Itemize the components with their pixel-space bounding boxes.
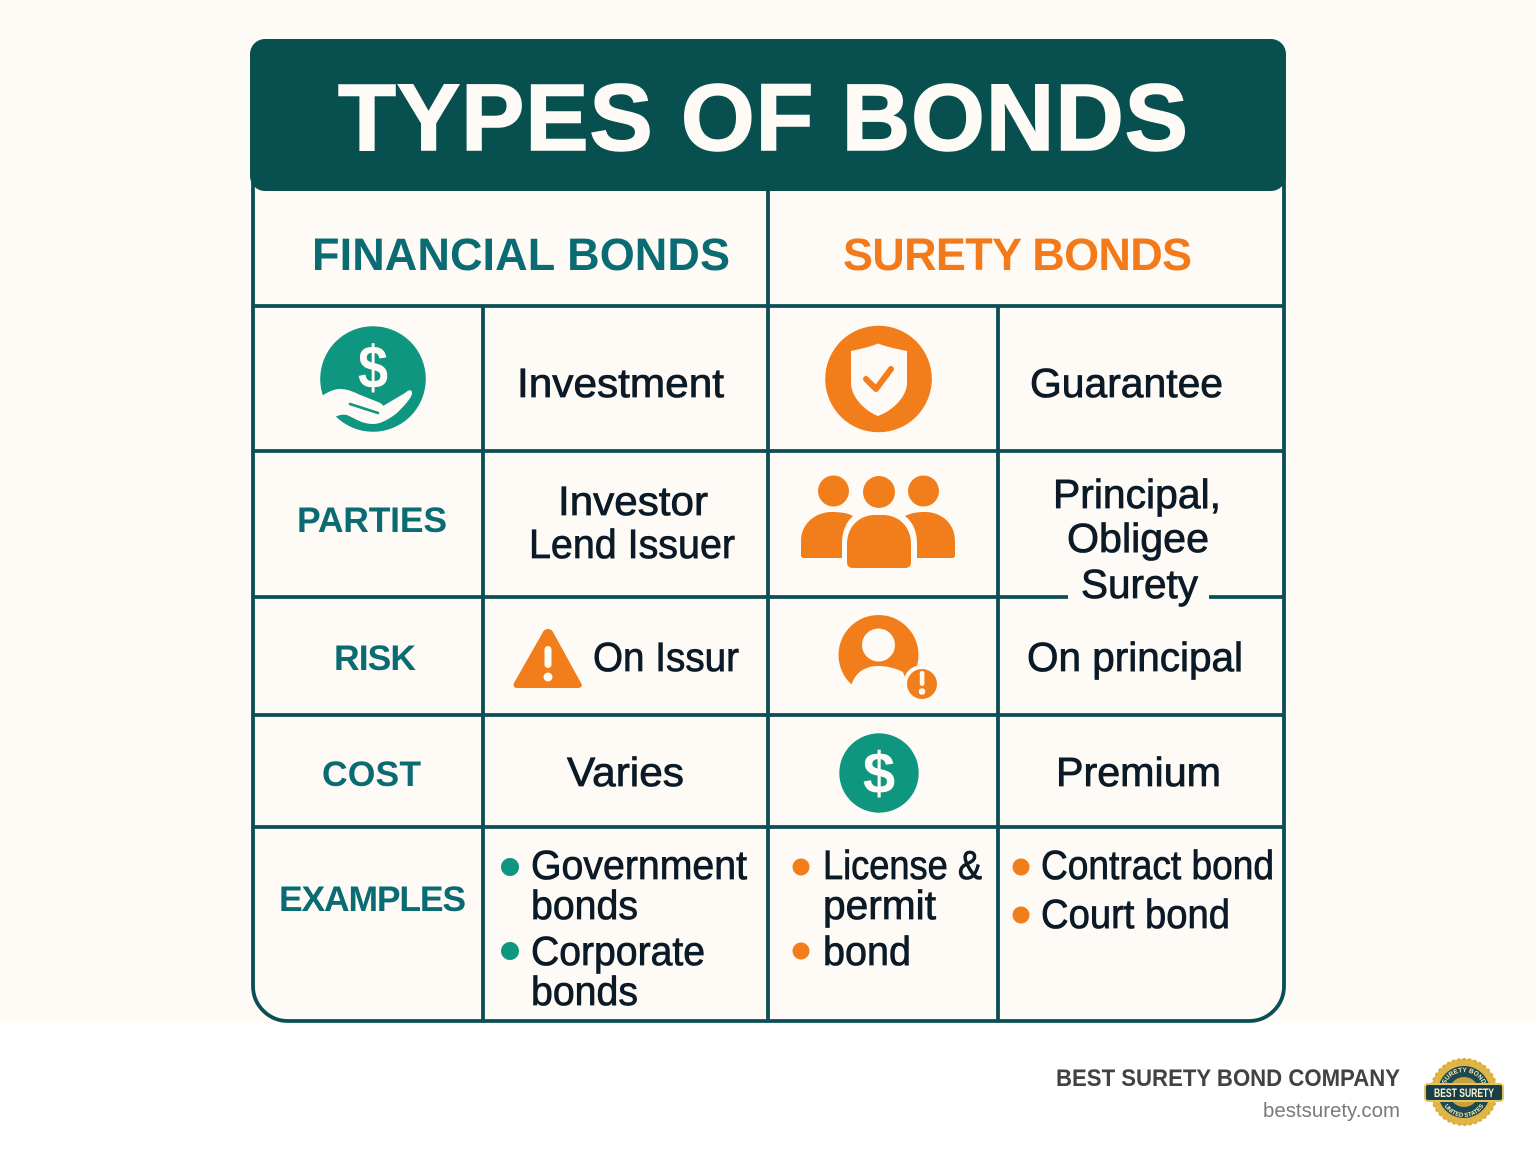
list: contract and court: Contract bond xyxy=(1041,842,1274,888)
icon: dollar coin xyxy=(839,733,919,813)
icon: seal badge: BEST SURETY xyxy=(1434,1088,1494,1100)
icon: shield with check xyxy=(825,326,932,432)
text: investment: Investment xyxy=(517,360,724,406)
list: license and permit xyxy=(792,842,982,974)
icon: dollar coin: $ xyxy=(863,741,895,806)
icon: seal badge xyxy=(1424,1058,1504,1126)
text: principal obligee surety: Obligee xyxy=(1067,515,1209,561)
text: guarantee: Guarantee xyxy=(1030,360,1223,406)
title banner xyxy=(250,39,1286,191)
list: contract and court xyxy=(1012,842,1274,937)
icon: seal badge: UNITED STATES xyxy=(1445,1104,1484,1117)
table xyxy=(253,170,1284,1021)
icon: warning triangle xyxy=(514,629,582,688)
label: cost: COST xyxy=(322,754,421,794)
footer url: bestsurety.com xyxy=(1263,1100,1400,1122)
footer company name: BEST SURETY BOND COMPANY xyxy=(1056,1065,1400,1092)
list: financial examples: bonds xyxy=(531,882,638,928)
text: on principal: On principal xyxy=(1027,634,1243,680)
list: financial examples: bonds xyxy=(531,968,638,1014)
text: investor lend issuer: Lend Issuer xyxy=(529,521,735,567)
title: TYPES OF BONDS xyxy=(338,65,1188,171)
list: license and permit: bond xyxy=(823,928,911,974)
text: principal obligee surety xyxy=(1053,471,1221,607)
icon: hand holding dollar: $ xyxy=(358,334,388,401)
heading: financial bonds: FINANCIAL BONDS xyxy=(312,229,730,280)
list: license and permit: permit xyxy=(823,882,936,928)
icon: seal badge: SURETY BOND xyxy=(1442,1068,1486,1083)
icon: hand holding dollar xyxy=(305,326,426,432)
label: examples: EXAMPLES xyxy=(279,879,466,919)
label: risk: RISK xyxy=(334,638,416,678)
icon: person with alert xyxy=(838,615,941,703)
text: investor lend issuer: Investor xyxy=(558,478,708,524)
heading: surety bonds: SURETY BONDS xyxy=(843,229,1192,280)
text: on issur: On Issur xyxy=(593,634,739,680)
list: contract and court: Court bond xyxy=(1041,891,1230,937)
text: principal obligee surety: Principal, xyxy=(1053,471,1221,517)
text: investor lend issuer xyxy=(529,478,735,567)
label: parties: PARTIES xyxy=(297,500,447,540)
list: license and permit: License & xyxy=(823,842,982,888)
text: premium: Premium xyxy=(1056,749,1221,795)
icon: three people xyxy=(801,476,955,568)
list: financial examples xyxy=(501,842,747,1014)
list: financial examples: Government xyxy=(531,842,747,888)
text: principal obligee surety: Surety xyxy=(1081,561,1199,607)
text: varies: Varies xyxy=(567,749,684,795)
list: financial examples: Corporate xyxy=(531,928,705,974)
